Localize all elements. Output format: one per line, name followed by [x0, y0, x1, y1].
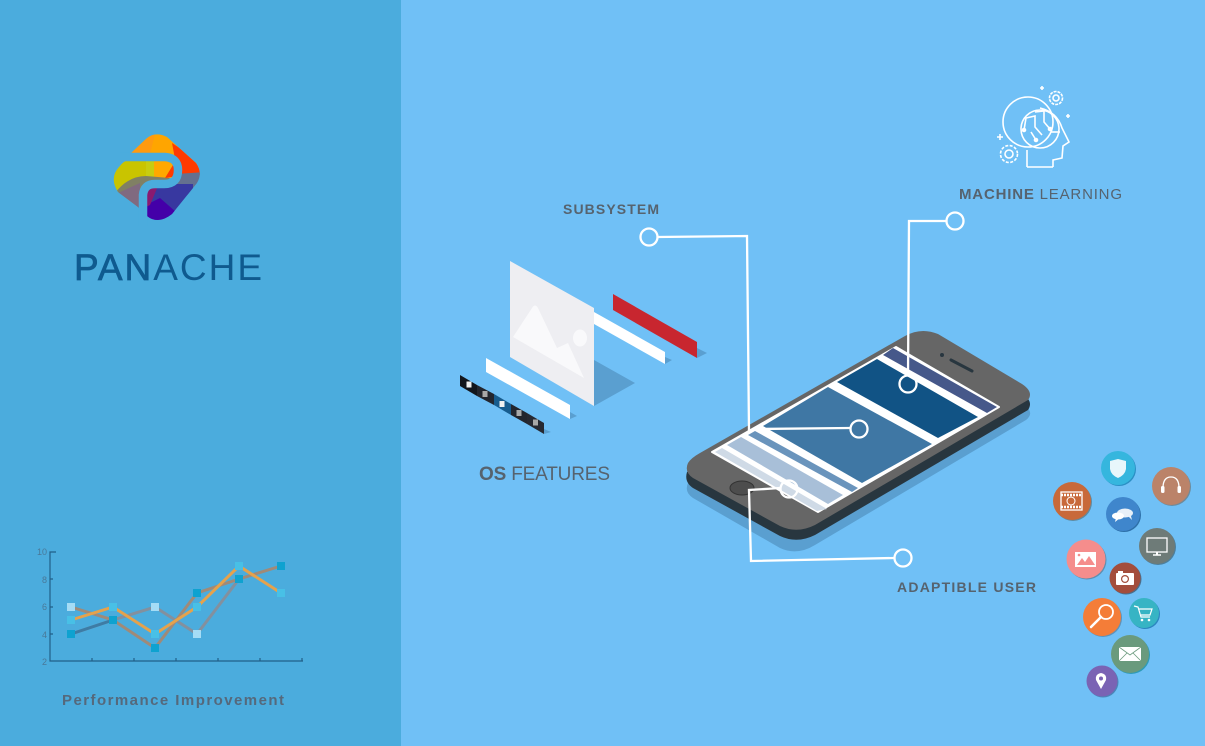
- series: brown: [71, 566, 281, 648]
- icon: location pin: [1086, 666, 1118, 698]
- speaker: [951, 360, 972, 371]
- panel: left sidebar: [0, 0, 401, 746]
- screen strip: status: [883, 348, 997, 413]
- phone side: [686, 341, 1030, 540]
- phone shadow: [687, 351, 1030, 551]
- screen frame: [712, 347, 999, 512]
- chart axis numbers: 10: [37, 547, 47, 557]
- label: machine learning: MACHINE LEARNING: [959, 186, 1122, 203]
- chart caption: Performance Improvement: [62, 692, 284, 709]
- icon: cart: [1129, 598, 1160, 629]
- series: orange: [71, 566, 281, 634]
- icon: AI head: [997, 86, 1070, 167]
- chart axis numbers: 6: [42, 602, 47, 612]
- markers: dark: [67, 562, 285, 652]
- icon: chat: [1106, 497, 1141, 532]
- big image sheet: [510, 261, 594, 406]
- sun glyph: [573, 330, 587, 346]
- icon: monitor: [1139, 528, 1176, 565]
- label: adaptible user: ADAPTIBLE USER: [897, 579, 1036, 595]
- screen panel: dark blue: [837, 359, 978, 438]
- chart axes: [50, 552, 303, 661]
- screen panel: mid blue: [763, 387, 932, 483]
- chart axis numbers: 8: [42, 575, 47, 585]
- label: subsystem: SUBSYSTEM: [563, 201, 659, 217]
- markers: light: [67, 603, 201, 638]
- phone face: [687, 331, 1030, 530]
- smartphone: [686, 331, 1030, 551]
- white bar left: [486, 358, 570, 419]
- camera dot: [940, 353, 944, 357]
- background: right area: [401, 0, 1205, 746]
- icon: mail: [1111, 635, 1150, 674]
- screen strip: lightest: [715, 448, 827, 511]
- series: grey: [71, 579, 239, 634]
- connector: subsystem: [640, 228, 868, 438]
- icon: headset: [1152, 467, 1191, 506]
- dark tab bar: [460, 375, 551, 434]
- mountain glyph: [513, 306, 584, 378]
- big sheet shadow: [594, 360, 635, 406]
- red bar: [613, 294, 697, 358]
- connector: machine learning: [900, 212, 964, 392]
- brand name: PANACHE: [74, 247, 262, 288]
- chart axis numbers: 2: [42, 657, 47, 667]
- icon: camera: [1110, 562, 1142, 594]
- markers: mid: [67, 562, 285, 638]
- chart axis numbers: [37, 547, 47, 667]
- screen strip: pale: [727, 437, 843, 504]
- icon: picture: [1066, 540, 1106, 580]
- white bar right: [594, 312, 665, 364]
- node: mid panel: [850, 420, 868, 438]
- connector branch into mid panel: [757, 428, 850, 429]
- icon: shield: [1101, 451, 1136, 486]
- icon: film: [1053, 482, 1092, 521]
- icon: search: [1083, 598, 1122, 637]
- illustration: OS features layers: [460, 261, 707, 434]
- label: OS features: OS FEATURES: [479, 464, 610, 485]
- connector: adaptable user: [749, 480, 912, 566]
- icon cluster: apps: [1053, 451, 1191, 698]
- line chart: [37, 547, 303, 667]
- series: dark start: [71, 620, 113, 634]
- screen strip: blue: [748, 431, 858, 492]
- chart axis numbers: 4: [42, 630, 47, 640]
- logo icon: [114, 134, 200, 220]
- home button: [730, 481, 754, 495]
